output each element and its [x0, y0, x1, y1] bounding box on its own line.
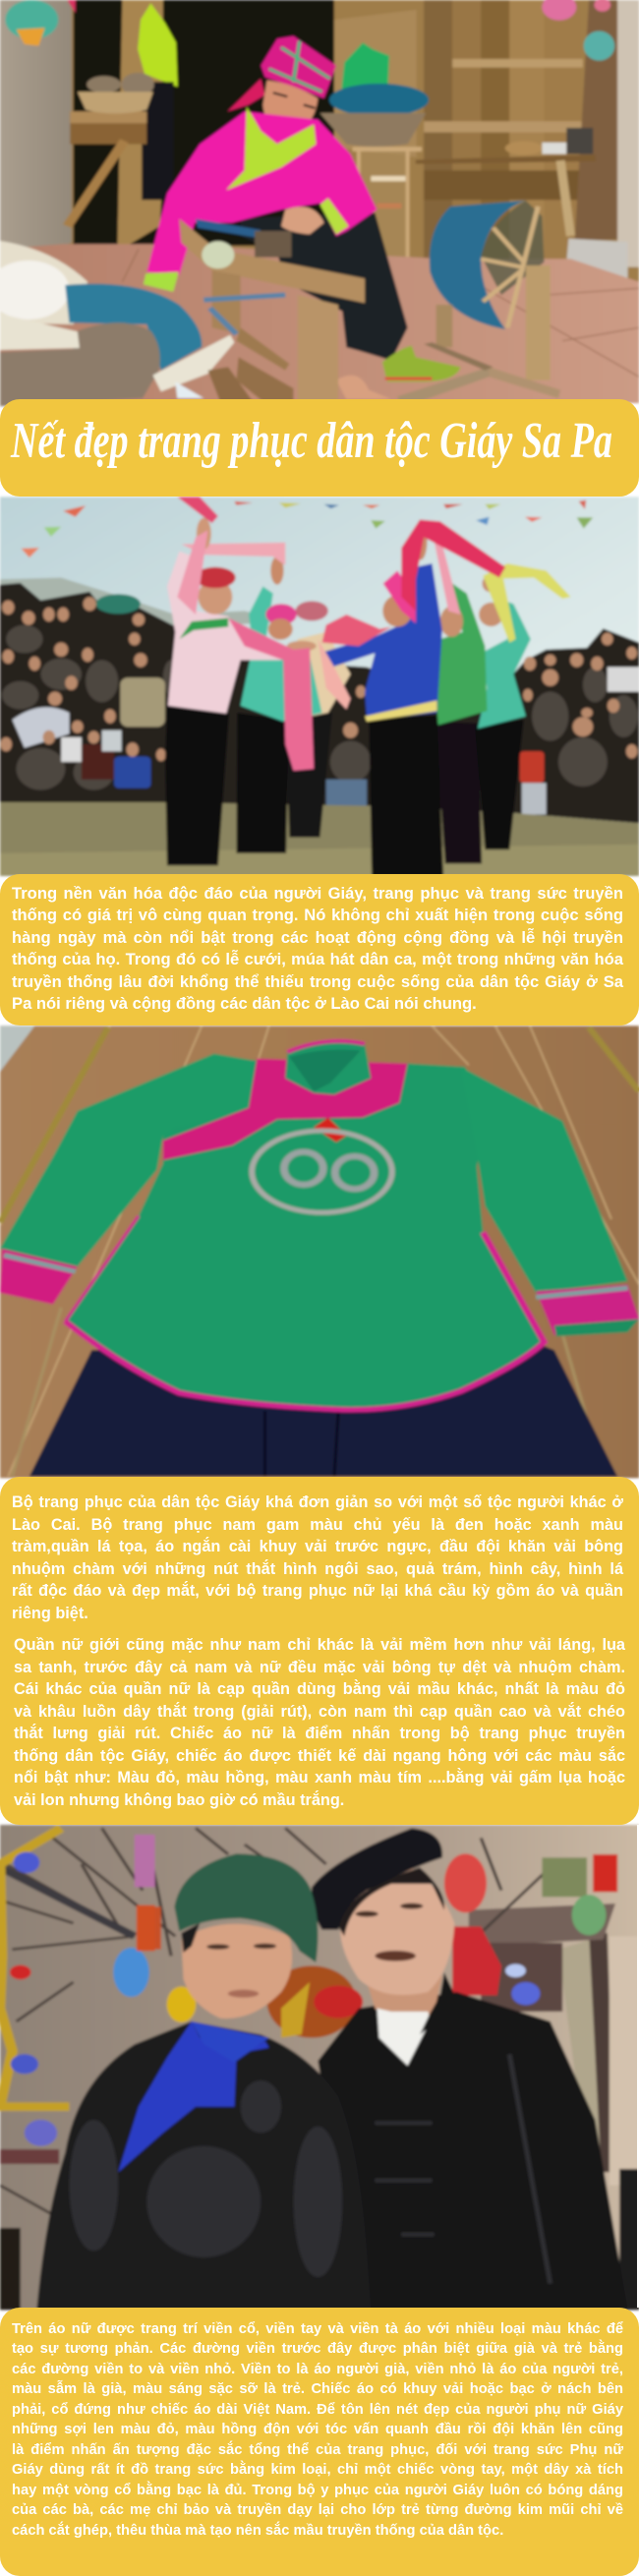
photo: elderly couple in black traditional dress — [0, 1825, 639, 2310]
pink blouse — [146, 111, 378, 275]
bamboo mat stripes — [0, 1025, 639, 1477]
paragraph: trims and jewellery: màu sẫm là già, màu sáng sặc sỡ là trẻ. Chiếc áo có khuy vải hoặc bạc ở nách bên — [12, 2381, 623, 2397]
checked headscarf — [261, 36, 336, 98]
text panel: costume description — [0, 1477, 639, 1825]
tiled floor — [0, 244, 639, 403]
red balloon — [444, 1853, 487, 1912]
white cone spools — [0, 314, 234, 398]
navy trousers — [29, 1340, 617, 1477]
woman blue panel — [118, 2021, 269, 2172]
paragraph: traditional costume value: thống của họ. Trong đó có lễ cưới, múa hát dân ca, một trong những văn hóa — [12, 950, 623, 968]
pale pink scarf — [181, 543, 285, 565]
photo: woman spinning blue yarn — [0, 0, 639, 406]
green balloon — [572, 1895, 607, 1935]
paragraph: trims and jewellery: hay một vòng cổ bằng bạc là đủ. Trong bộ y phục của người Giáy luôn có bóng dáng — [12, 2483, 623, 2498]
wood wall planks — [424, 0, 583, 263]
paragraph: men's costume: nhuộm chàm với những nút thắt hình ngôi sao, quả trám, hình cây, hình lá — [12, 1559, 623, 1577]
woman hair — [181, 1923, 200, 1953]
man hair — [338, 1867, 444, 1936]
man neck — [367, 1975, 442, 2034]
man face — [340, 1867, 454, 1995]
left sleeve — [0, 1054, 253, 1266]
tassels right — [542, 0, 614, 61]
woven tray with blue cloth — [320, 84, 429, 146]
text panel: introduction — [0, 874, 639, 1025]
dark door frame — [589, 1933, 615, 2172]
right cuff — [536, 1285, 639, 1335]
black beret — [312, 1828, 442, 1930]
paragraph: trims and jewellery: những sợi len màu đỏ, màu hồng độn với tóc vấn quanh đầu rồi đội khăn lên cũng — [12, 2422, 623, 2437]
paragraph: women's costume: thắt lưng giải rút. Chiếc áo nữ là điểm nhấn trong bộ trang phục truyền — [14, 1725, 625, 1742]
man white collar — [378, 2009, 430, 2066]
paragraph: traditional costume value — [12, 884, 623, 1013]
stand collar — [285, 1041, 371, 1094]
dancer 3 trousers behind — [285, 713, 332, 838]
paragraph: trims and jewellery — [12, 2321, 623, 2539]
grassy ground — [0, 802, 639, 876]
dancer 4 trousers — [369, 716, 443, 876]
woman dress sheen — [69, 2080, 342, 2277]
garment green with white scarf — [341, 42, 389, 91]
paragraph: trims and jewellery: là điểm nhấn ấn tượng đặc sắc tổng thể của trang phục, đối với trang sức Phụ nữ — [12, 2442, 623, 2458]
cabinet and top shelf — [469, 1903, 615, 1946]
dancer 4 red scarf — [318, 520, 505, 709]
dancer 6 trousers — [475, 720, 524, 849]
paragraph: trims and jewellery: tạo sự tương phản. Các đường viền trước đây được phân biệt giữa già và trẻ bằng — [12, 2341, 623, 2357]
dancer 3 — [294, 601, 351, 720]
hands — [281, 206, 324, 234]
paragraph: men's costume: riêng biệt. — [12, 1605, 88, 1622]
basket with wool balls — [78, 73, 154, 113]
garment lime green — [138, 3, 178, 87]
paragraph: traditional costume value: Pa nói riêng và cộng đồng các dân tộc ở Lào Cai nói chung. — [12, 994, 477, 1013]
bare branches — [0, 1828, 551, 2215]
paragraph: women's costume: sa tanh, trước đây cả nam và nữ đều mặc vải bông tự dệt và nhuộm chàm. — [14, 1658, 625, 1675]
gold tinsel left — [0, 1828, 69, 2107]
face and neck — [262, 81, 318, 135]
paragraph: traditional costume value: hàng ngày mà còn nổi bật trong các hoạt động cộng đồng và lễ hội truyền — [12, 928, 623, 947]
text panel: decoration and jewellery — [0, 2308, 639, 2576]
right bracelet — [335, 1156, 375, 1189]
paragraph: men's costume: tràm,quần lá tọa, áo ngắn cài khuy vải trước ngực, đầu đội khăn vải bông — [12, 1538, 623, 1555]
white edge strip beside couple photo — [637, 1825, 639, 2308]
spinning wheel frame — [179, 219, 365, 401]
paragraph: trims and jewellery: cách cắt ghép, thêu thùa mà tạo nên sắc mầu truyền thống của dân tộc. — [12, 2523, 503, 2539]
paragraph: women's costume: và khâu luồn dây thắt trong (giải rút), còn nam thì cạp quần cao và vắt chéo — [14, 1703, 625, 1721]
blue balloon — [113, 1948, 149, 1997]
woman face — [181, 1924, 292, 2019]
crowd faces — [0, 597, 637, 761]
blue yarn crescent on wheel — [430, 201, 526, 329]
paragraph: women's costume: thống dân tộc Giáy, chiếc áo được thiết kế dài ngang hông với các màu sắc — [14, 1746, 625, 1764]
paragraph: men's costume — [12, 1493, 623, 1622]
red knot — [314, 1118, 346, 1142]
tinsel and lights — [10, 1835, 540, 2146]
paragraph: women's costume: Cái khác của quần nữ là cạp quần dùng bằng vải mầu khác, nhất là màu đỏ — [14, 1680, 625, 1698]
dancer 5 blouse — [435, 541, 487, 725]
right shelf with bowl and jars — [416, 128, 596, 236]
paragraph: trims and jewellery: phải, cổ đứng như chiếc áo dài Việt Nam. Để tôn lên nét đẹp của người phụ nữ Giáy — [12, 2402, 623, 2418]
dancer 6 blouse — [478, 575, 531, 729]
red charm — [137, 1905, 155, 1951]
open door right — [334, 10, 417, 157]
crowd highlights — [12, 594, 639, 814]
green plant top right — [542, 1857, 587, 1897]
reel stand — [397, 206, 560, 401]
corner mat edge — [0, 1025, 34, 1072]
photo: folk dance at festival — [0, 497, 639, 876]
lime cuffs — [144, 199, 348, 292]
right sleeve — [460, 1067, 627, 1293]
crowd dark mass — [0, 583, 639, 823]
silver neck ring — [252, 1131, 392, 1212]
paragraph: women's costume: Quần nữ giới cũng mặc như nam chỉ khác là vải mềm hơn như vải láng, lụa — [14, 1636, 625, 1654]
magenta hem — [65, 1232, 544, 1410]
paragraph: trims and jewellery: Giáy dùng rất ít đồ trang sức bằng kim loại, chỉ một chiếc vòng tay, một dây xà tích — [12, 2462, 623, 2478]
red and gold tinsel centre — [267, 1965, 363, 2038]
photo: green blouse laid out with silver jewellery — [0, 1025, 639, 1478]
bare ankle and second shoe — [336, 376, 391, 399]
hanging black cloth — [142, 82, 174, 200]
man stand collar — [420, 1972, 458, 2034]
blouse body — [65, 1060, 544, 1410]
black trousers — [241, 213, 408, 361]
man jacket — [318, 1992, 627, 2310]
wall right — [558, 1940, 604, 2195]
embroidered shoe — [382, 346, 460, 381]
paragraph: women's costume: vải lon nhưng không bao giờ có mầu trắng. — [14, 1791, 344, 1809]
brown yarn pile — [0, 322, 160, 406]
dancer 1 pink scarf — [177, 497, 314, 771]
white wool heap — [0, 241, 87, 324]
left bracelet — [284, 1152, 323, 1185]
paragraph: traditional costume value: thống có giá trị vô cùng quan trọng. Nó không chỉ xuất hiện trong cuộc sống — [12, 906, 623, 924]
dancer 2 trousers — [236, 713, 289, 853]
dancer 1 blouse — [167, 518, 317, 714]
dark doorway — [74, 0, 334, 246]
shelf and brace — [67, 111, 146, 226]
dancer 1 trousers — [165, 706, 229, 865]
open door left — [117, 0, 163, 252]
paragraph: women's costume — [14, 1636, 625, 1809]
dancer 2 teal blouse — [241, 556, 322, 722]
right pillar — [564, 0, 639, 290]
red envelope — [593, 1854, 617, 1892]
shelf left — [0, 2149, 59, 2164]
paragraph: men's costume: Lào Cai. Bộ trang phục nam gam màu chủ yếu là đen hoặc xanh màu — [12, 1516, 623, 1534]
green knit hat — [174, 1853, 318, 1962]
woman dress — [36, 2021, 371, 2310]
title banner — [0, 399, 639, 497]
misty mountain — [0, 577, 285, 639]
magenta yoke — [163, 1059, 408, 1160]
yellow ornament — [167, 1986, 196, 2022]
paragraph: men's costume: Bộ trang phục của dân tộc Giáy khá đơn giản so với một số tộc người khác ở — [12, 1493, 623, 1511]
paragraph: traditional costume value: Trong nền văn hóa độc đáo của người Giáy, trang phục và trang sức truyền — [12, 884, 623, 903]
yarn rack — [353, 149, 422, 303]
dancer 5 trousers — [436, 722, 482, 863]
dancer 4 blue blouse — [320, 521, 442, 722]
left cuff — [0, 1249, 78, 1305]
paragraph: women's costume: nổi bật như: Màu đỏ, màu hồng, màu xanh màu tím ....bằng vải gấm lụa hoặc — [14, 1769, 625, 1786]
bunting flags — [22, 500, 593, 557]
paragraph: trims and jewellery: các đường viền to và viền nhỏ. Viền to là áo người già, viền nhỏ là áo của người trẻ, — [12, 2362, 623, 2377]
blue yarn skein — [65, 284, 202, 371]
paragraph: trims and jewellery: của các bà, các mẹ chỉ bảo và truyền dạy lại cho lớp trẻ từng đường kim mũi chỉ về — [12, 2502, 623, 2518]
paragraph: traditional costume value: truyền thống lâu đời khổng thể thiếu trong cuộc sống của dân tộc Giáy ở Sa — [12, 972, 623, 991]
lime collar and yoke — [226, 106, 316, 190]
paragraph: men's costume: rất độc đáo và đẹp mắt, với bộ trang phục nữ lại khá cầu kỳ gồm áo và quần — [12, 1582, 623, 1600]
yellow scarf — [483, 563, 570, 643]
headscarf tail — [227, 79, 264, 111]
paragraph: trims and jewellery: Trên áo nữ được trang trí viền cổ, viền tay và viền tà áo với nhiều loại màu khác để — [12, 2321, 623, 2337]
red heart decoration — [452, 1926, 501, 1995]
crowd clothing mid-tones — [2, 625, 638, 790]
tassels left — [5, 0, 76, 46]
concrete wall left — [0, 0, 72, 253]
